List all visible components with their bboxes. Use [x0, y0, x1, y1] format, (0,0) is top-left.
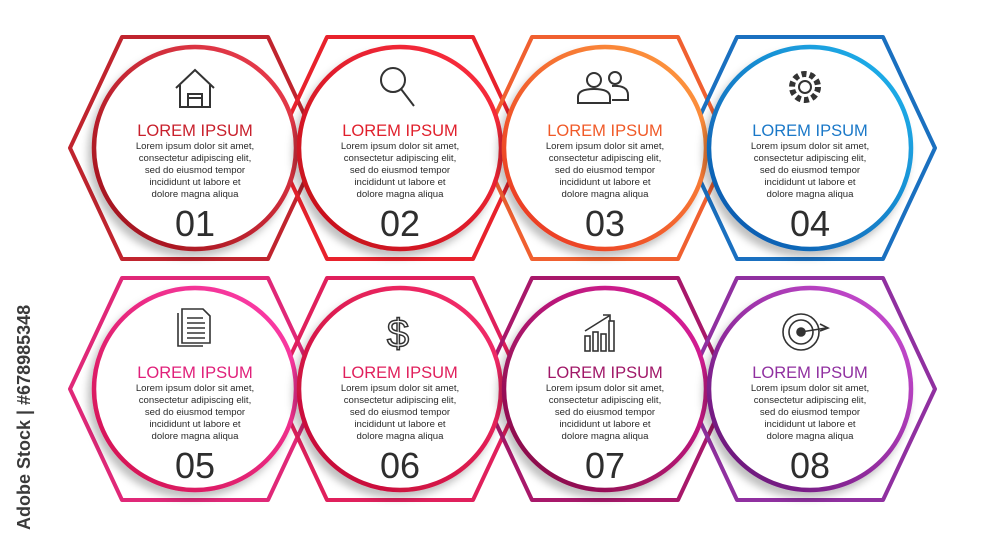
panel 02: sed do eiusmod tempor — [350, 165, 451, 176]
panel 08: Lorem ipsum dolor sit amet, — [751, 383, 869, 394]
panel 06: 06 — [380, 445, 420, 486]
panel 07: sed do eiusmod tempor — [555, 407, 656, 418]
watermark side text: Adobe Stock | #678985348 — [14, 305, 34, 530]
panel 05: LOREM IPSUM — [137, 364, 253, 382]
icon: gear — [792, 74, 818, 100]
panel 04: sed do eiusmod tempor — [760, 165, 861, 176]
panel 05: 05 — [175, 445, 215, 486]
panel 07: Lorem ipsum dolor sit amet, — [546, 383, 664, 394]
panel 08: LOREM IPSUM — [752, 364, 868, 382]
panel 05: Lorem ipsum dolor sit amet, — [136, 383, 254, 394]
panel 08: consectetur adipiscing elit, — [754, 395, 866, 406]
panel 06: LOREM IPSUM — [342, 364, 458, 382]
panel 03: dolore magna aliqua — [562, 189, 649, 200]
panel 02: consectetur adipiscing elit, — [344, 153, 456, 164]
panel 03: Lorem ipsum dolor sit amet, — [546, 141, 664, 152]
panel 02: Lorem ipsum dolor sit amet, — [341, 141, 459, 152]
panel 03: LOREM IPSUM — [547, 122, 663, 140]
panel 03 — [504, 47, 706, 249]
panel 07: incididunt ut labore et — [559, 419, 651, 430]
panel 02 — [299, 47, 501, 249]
panel 01: Lorem ipsum dolor sit amet, — [136, 141, 254, 152]
panel 02: dolore magna aliqua — [357, 189, 444, 200]
hexagon outlines row 2 — [70, 278, 935, 500]
panel 04: 04 — [790, 203, 830, 244]
panel 01: 01 — [175, 203, 215, 244]
panel 08: sed do eiusmod tempor — [760, 407, 861, 418]
panel 08: dolore magna aliqua — [767, 431, 854, 442]
icon: growth chart — [585, 315, 614, 351]
panel 05 — [94, 288, 296, 490]
panel 06: Lorem ipsum dolor sit amet, — [341, 383, 459, 394]
panel 06: dolore magna aliqua — [357, 431, 444, 442]
panel 07: LOREM IPSUM — [547, 364, 663, 382]
panel 04 — [709, 47, 911, 249]
icon: magnifier — [381, 68, 414, 106]
panel 01: sed do eiusmod tempor — [145, 165, 246, 176]
panel 05: sed do eiusmod tempor — [145, 407, 246, 418]
panel 01: LOREM IPSUM — [137, 122, 253, 140]
panel 04: Lorem ipsum dolor sit amet, — [751, 141, 869, 152]
panel 05: consectetur adipiscing elit, — [139, 395, 251, 406]
panel 06: sed do eiusmod tempor — [350, 407, 451, 418]
icon: dollar: $ — [387, 312, 409, 356]
panel 04: incididunt ut labore et — [764, 177, 856, 188]
panel 01 — [94, 47, 296, 249]
panel 07 — [504, 288, 706, 490]
panel 03: sed do eiusmod tempor — [555, 165, 656, 176]
panel 02: 02 — [380, 203, 420, 244]
icon: target — [783, 314, 828, 350]
panel 08: incididunt ut labore et — [764, 419, 856, 430]
panel 04: dolore magna aliqua — [767, 189, 854, 200]
panel 07: dolore magna aliqua — [562, 431, 649, 442]
panel 06 — [299, 288, 501, 490]
panel 02: LOREM IPSUM — [342, 122, 458, 140]
panel 08: 08 — [790, 445, 830, 486]
panel 03: 03 — [585, 203, 625, 244]
panel 03: incididunt ut labore et — [559, 177, 651, 188]
panel 07: 07 — [585, 445, 625, 486]
panel 08 — [709, 288, 911, 490]
panel 01: dolore magna aliqua — [152, 189, 239, 200]
panel 04: consectetur adipiscing elit, — [754, 153, 866, 164]
panel 01: incididunt ut labore et — [149, 177, 241, 188]
panel 07: consectetur adipiscing elit, — [549, 395, 661, 406]
panel 06: incididunt ut labore et — [354, 419, 446, 430]
icon: users — [578, 72, 628, 103]
icon: house — [176, 70, 214, 107]
panel 05: dolore magna aliqua — [152, 431, 239, 442]
icon: document — [178, 309, 210, 346]
panel 05: incididunt ut labore et — [149, 419, 241, 430]
panel 02: incididunt ut labore et — [354, 177, 446, 188]
panel 01: consectetur adipiscing elit, — [139, 153, 251, 164]
panel 03: consectetur adipiscing elit, — [549, 153, 661, 164]
panel 06: consectetur adipiscing elit, — [344, 395, 456, 406]
hexagon outlines row 1 — [70, 37, 935, 259]
panel 04: LOREM IPSUM — [752, 122, 868, 140]
